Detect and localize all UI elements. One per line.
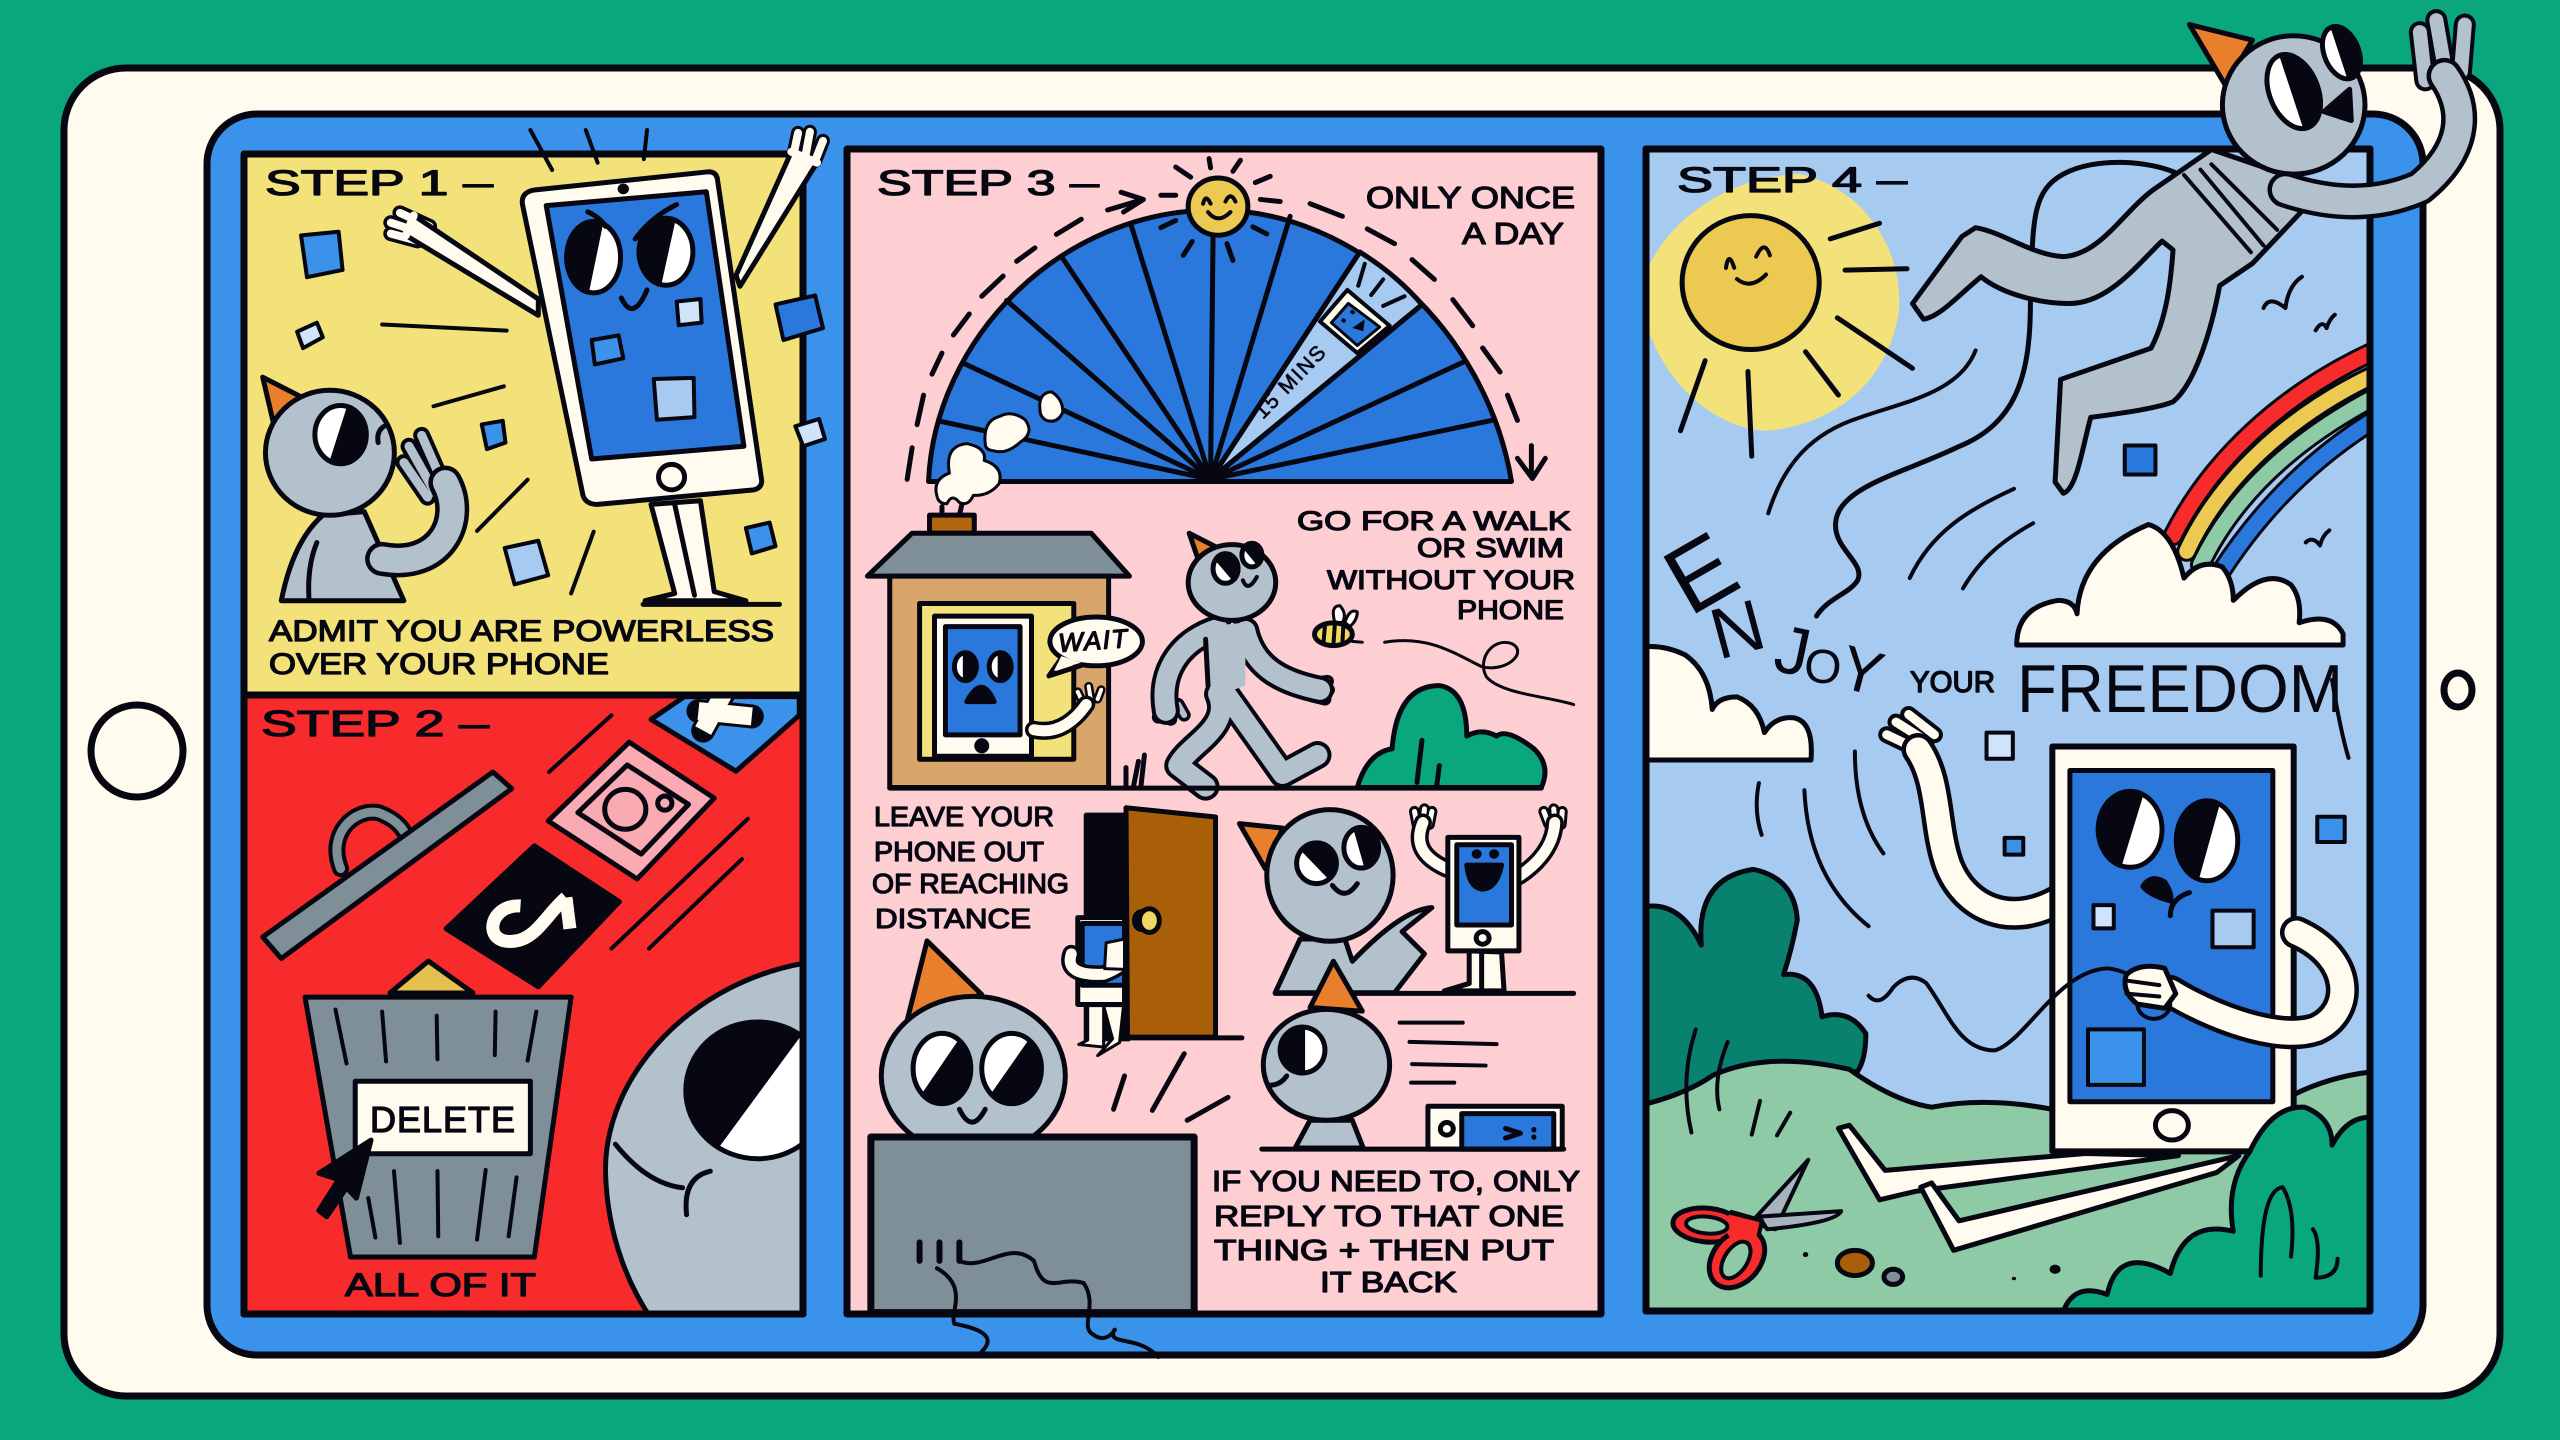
- step 3 lower illustrations: [871, 788, 1574, 1357]
- enjoy lettering: O: [1802, 639, 1844, 696]
- lower foreground: [1670, 680, 2376, 1311]
- big sun: [1680, 216, 1912, 456]
- walk or swim caption: WITHOUT YOUR: [1327, 565, 1575, 595]
- wait text: WAIT: [1057, 623, 1130, 658]
- chest bands: [2184, 164, 2277, 252]
- sun glow: [1641, 174, 1899, 431]
- tiny phone in wedge: [1320, 264, 1405, 353]
- cat looking up: [263, 377, 452, 601]
- pointing cat and happy phone: [1239, 809, 1574, 993]
- floating squares: [1987, 733, 2345, 855]
- bee and flight path: [1315, 606, 1574, 705]
- panel: step 1: [244, 130, 825, 695]
- green bush: [1126, 686, 1545, 787]
- reply caption: IT BACK: [1320, 1267, 1458, 1299]
- cursor: [319, 1140, 371, 1217]
- step 1 caption: OVER YOUR PHONE: [269, 648, 609, 681]
- enjoy lettering: [1647, 512, 1891, 710]
- legs: [1838, 1125, 2239, 1250]
- mouth: [2324, 89, 2351, 121]
- leave your phone caption: OF REACHING: [872, 868, 1069, 899]
- wait speech bubble: [1049, 617, 1142, 676]
- step 1 caption: [269, 615, 774, 681]
- only once a day label: [1366, 180, 1575, 251]
- phone arms and legs: [391, 132, 823, 604]
- home button: [91, 705, 183, 797]
- cat body and legs: [1912, 150, 2307, 493]
- day semicircle chart: [867, 159, 1574, 787]
- panel: step 3: [847, 149, 1601, 1357]
- walking cat: [1158, 533, 1328, 787]
- tablet screen: [207, 114, 2423, 1355]
- your lettering: YOUR: [1910, 666, 1995, 699]
- step 1 illustration: [263, 130, 825, 604]
- delete label: [355, 1081, 530, 1154]
- left arm: [1887, 715, 2058, 913]
- house: [867, 505, 1142, 787]
- walk or swim caption: [1297, 506, 1575, 625]
- grass and wind lines: [1686, 752, 1883, 1135]
- waving arm: [2285, 20, 2465, 201]
- leave your phone caption: PHONE OUT: [874, 836, 1044, 867]
- hat: [2189, 25, 2253, 85]
- only once a day label: A DAY: [1462, 216, 1564, 251]
- ground line: [890, 786, 1541, 791]
- panel: step 2: [244, 692, 830, 1318]
- leave your phone caption: DISTANCE: [875, 903, 1031, 934]
- dark green bush: [1641, 869, 1866, 1105]
- dashed sun path arrow: [907, 192, 1545, 479]
- TikTok icon: [446, 846, 619, 987]
- chimney smoke: [936, 392, 1063, 504]
- step 2 heading: STEP 2 –: [261, 703, 489, 744]
- angry phone: [522, 172, 762, 504]
- yellow paper in bin: [390, 961, 473, 993]
- scissors: [1670, 1160, 1841, 1294]
- motion lines: [549, 715, 748, 949]
- left cloud: [1641, 647, 1811, 760]
- motion lines: [382, 130, 647, 593]
- lower scene: [1641, 647, 2376, 1316]
- reply caption: THING + THEN PUT: [1214, 1235, 1554, 1267]
- grassy hill: [1641, 1061, 2376, 1316]
- right arm holding cord: [2125, 933, 2342, 1033]
- walk or swim caption: OR SWIM: [1417, 533, 1564, 563]
- walk or swim caption: PHONE: [1457, 595, 1564, 625]
- step 4 heading: STEP 4 –: [1677, 161, 1908, 200]
- Instagram icon: [548, 742, 714, 879]
- enjoy lettering: E: [1647, 512, 1755, 635]
- smiling sun: [1161, 159, 1280, 260]
- cat at laptop: [871, 941, 1228, 1357]
- wind lines and string: [1768, 162, 2178, 616]
- Facebook icon: [651, 692, 799, 771]
- big cloud: [2017, 525, 2343, 645]
- 15 mins label: 15 MINS: [1250, 341, 1331, 423]
- step 1 caption: ADMIT YOU ARE POWERLESS: [269, 615, 774, 648]
- upper scene: [1641, 162, 2376, 645]
- trash bin: [305, 997, 571, 1257]
- big cat head: [602, 962, 800, 1310]
- step 4 scene: [1641, 162, 2376, 1316]
- panel: step 4: [1641, 149, 2376, 1316]
- reply caption: REPLY TO THAT ONE: [1214, 1201, 1564, 1233]
- door with hidden phone: [1070, 808, 1242, 1056]
- pebbles: [1803, 1250, 2061, 1284]
- cat with phone lying down: [1262, 961, 1564, 1149]
- rainbow: [2173, 350, 2376, 574]
- step 1 heading: STEP 1 –: [265, 164, 494, 203]
- enjoy lettering: Y: [1833, 633, 1891, 710]
- enjoy lettering: N: [1702, 585, 1773, 675]
- head: [2222, 36, 2365, 174]
- reply caption: IF YOU NEED TO, ONLY: [1212, 1166, 1580, 1198]
- all of it caption: ALL OF IT: [345, 1267, 536, 1303]
- leave your phone caption: [872, 801, 1069, 934]
- step 3 heading: STEP 3 –: [877, 164, 1100, 203]
- walk or swim caption: GO FOR A WALK: [1297, 506, 1571, 536]
- phone in window: [935, 616, 1101, 756]
- leave your phone caption: LEAVE YOUR: [874, 801, 1054, 832]
- 15 minute wedge: [1211, 252, 1422, 479]
- eyes: [2258, 23, 2367, 133]
- only once a day label: ONLY ONCE: [1366, 180, 1575, 215]
- flying cat: [1912, 20, 2465, 493]
- freedom string end: [2332, 680, 2349, 758]
- freedom lettering: FREEDOM: [2017, 651, 2343, 727]
- wedge spokes: [940, 216, 1492, 479]
- birds and square: [2125, 277, 2335, 546]
- side camera: [2444, 673, 2472, 707]
- right green bush: [2063, 1107, 2376, 1311]
- free phone: [2052, 747, 2294, 1151]
- cut cord: [1869, 968, 2146, 1050]
- delete text: DELETE: [370, 1099, 515, 1140]
- bin lid: [263, 772, 512, 959]
- floating app squares: [297, 232, 825, 584]
- step 2 illustration: [263, 692, 830, 1318]
- reply caption: [1212, 1166, 1580, 1299]
- enjoy lettering: J: [1768, 610, 1817, 692]
